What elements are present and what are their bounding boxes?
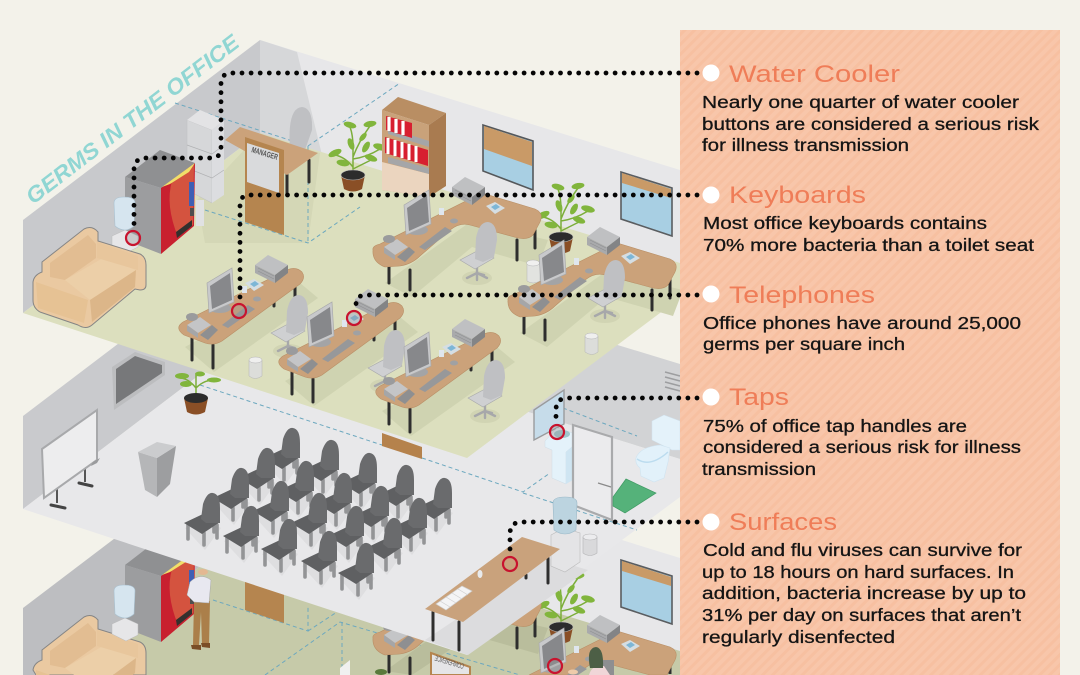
plant near bookcase <box>327 120 388 192</box>
mirror <box>534 390 564 440</box>
desk three <box>376 319 515 436</box>
right window <box>621 172 672 236</box>
keyboards entry: 70% more bacteria than a toilet seat <box>703 235 1034 255</box>
manager door: MANAGER <box>250 145 279 162</box>
surfaces entry: Surfaces <box>729 509 837 536</box>
telephones marker <box>702 286 720 302</box>
telephone connector <box>356 295 697 305</box>
taps entry: considered a serious risk for illness <box>703 437 1021 457</box>
top office floor <box>21 29 683 458</box>
water cooler connector <box>134 73 697 226</box>
title: GERMS IN THE OFFICE <box>21 29 245 209</box>
desk one <box>179 255 318 372</box>
water cooler <box>112 197 138 253</box>
taps marker <box>702 388 720 406</box>
manager desk <box>225 127 318 195</box>
television <box>112 352 165 410</box>
white marker dots <box>702 64 720 530</box>
water cooler entry: buttons are considered a serious risk <box>702 114 1039 134</box>
surfaces entry: 31% per day on surfaces that aren’t <box>702 605 1021 625</box>
hotspot rings <box>126 231 564 571</box>
bin behind corner desk <box>526 260 540 283</box>
taps entry <box>702 384 1021 479</box>
corner desk back right <box>508 227 683 347</box>
lower floor vending machine <box>125 538 195 642</box>
manager chair <box>290 107 312 150</box>
taps entry: transmission <box>702 459 816 479</box>
top floor carpet <box>23 133 680 458</box>
tap hotspot <box>550 425 564 439</box>
corner desk back left <box>373 177 548 297</box>
lower floor left desk <box>373 565 548 675</box>
top floor water tank <box>196 200 204 226</box>
meeting room floor surface <box>23 329 680 655</box>
door <box>382 433 422 459</box>
taps entry: Taps <box>729 384 789 411</box>
telephones entry: Office phones have around 25,000 <box>703 313 1021 333</box>
lower floor partition lines <box>213 600 520 675</box>
seated woman <box>568 647 614 675</box>
water cooler entry <box>702 61 1039 155</box>
lower floor carpet <box>57 521 680 675</box>
surfaces entry: Cold and flu viruses can survive for <box>703 540 1022 560</box>
manager room partition lines <box>175 83 400 243</box>
floor bin right <box>585 333 598 354</box>
telephones entry: Telephones <box>729 282 875 309</box>
lower floor water cooler <box>112 585 138 641</box>
keyboards entry: Most office keyboards contains <box>703 213 987 233</box>
surface connector <box>510 522 697 552</box>
lower floor window <box>621 560 672 624</box>
whiteboard <box>42 410 100 508</box>
keyboard hotspot <box>232 304 246 318</box>
keyboard connector <box>240 195 697 298</box>
lower floor keyboard hotspot <box>548 659 562 673</box>
manager room shade <box>197 133 320 243</box>
water cooler entry: Water Cooler <box>729 61 900 88</box>
bookcase <box>382 97 446 197</box>
couch <box>33 228 146 328</box>
meeting room floor <box>23 236 680 655</box>
surfaces entry: regularly disenfected <box>702 627 895 647</box>
desk two <box>279 289 418 406</box>
keyboards entry: Keyboards <box>729 182 866 209</box>
right desk chair <box>588 260 625 323</box>
surfaces entry: addition, bacteria increase by up to <box>702 583 1026 603</box>
surface hotspot <box>503 557 517 571</box>
mirrored conference sign: CONFERENCE <box>434 654 465 671</box>
meeting room back wall <box>260 236 680 459</box>
desk one chair <box>271 295 308 358</box>
person at vending machine <box>187 569 211 650</box>
water cooler hotspot <box>126 231 140 245</box>
desk three chair <box>468 360 505 423</box>
lower office floor <box>23 428 680 675</box>
tap connector <box>556 398 697 418</box>
lower floor right desk <box>529 615 676 675</box>
table shadow <box>425 558 588 655</box>
window with blind <box>483 125 533 190</box>
information panel <box>680 30 1060 675</box>
taps entry: 75% of office tap handles are <box>703 416 967 436</box>
vending machine <box>125 150 195 254</box>
water cooler entry: Nearly one quarter of water cooler <box>702 92 1019 112</box>
sink <box>545 428 573 484</box>
small plant <box>175 372 221 414</box>
green bath mat <box>613 479 656 513</box>
floor bin left <box>249 357 262 378</box>
telephones entry: germs per square inch <box>703 334 905 354</box>
bathroom door <box>573 425 612 520</box>
back plant <box>535 182 596 254</box>
manager door <box>245 137 284 235</box>
keyboards entry <box>703 182 1034 255</box>
panel background <box>680 30 1060 675</box>
surfaces marker <box>702 514 720 530</box>
long table <box>425 537 560 650</box>
surfaces entry <box>702 509 1026 647</box>
lower floor door <box>245 525 284 623</box>
lower floor back wall <box>260 428 680 675</box>
lower floor plant <box>535 572 596 644</box>
rows of meeting chairs <box>184 428 453 600</box>
water cooler entry: for illness transmission <box>702 135 909 155</box>
filing cabinet <box>187 110 224 203</box>
lower floor white object <box>340 660 350 675</box>
dotted connector lines <box>134 73 697 552</box>
lower floor plant top <box>375 669 387 675</box>
meeting room left wall <box>23 236 260 509</box>
water cooler marker <box>702 64 720 82</box>
meeting room water cooler <box>551 497 580 572</box>
telephone hotspot <box>347 311 361 325</box>
top floor back wall <box>260 40 680 265</box>
telephones entry <box>703 282 1021 354</box>
toilet <box>636 415 680 482</box>
surfaces entry: up to 18 hours on hard surfaces. In <box>702 562 1014 582</box>
top floor wall shadow <box>260 40 322 155</box>
lower floor couch <box>33 616 146 675</box>
desk two chair <box>368 330 405 393</box>
meeting room partition lines <box>200 385 637 530</box>
wall vent <box>665 372 680 391</box>
mirrored conference sign <box>431 653 470 675</box>
waste bin <box>583 534 597 556</box>
corner desk chair <box>460 222 497 285</box>
podium <box>138 442 176 497</box>
top floor left wall <box>23 40 260 313</box>
keyboards marker <box>702 186 720 204</box>
lower floor left wall <box>23 428 260 675</box>
